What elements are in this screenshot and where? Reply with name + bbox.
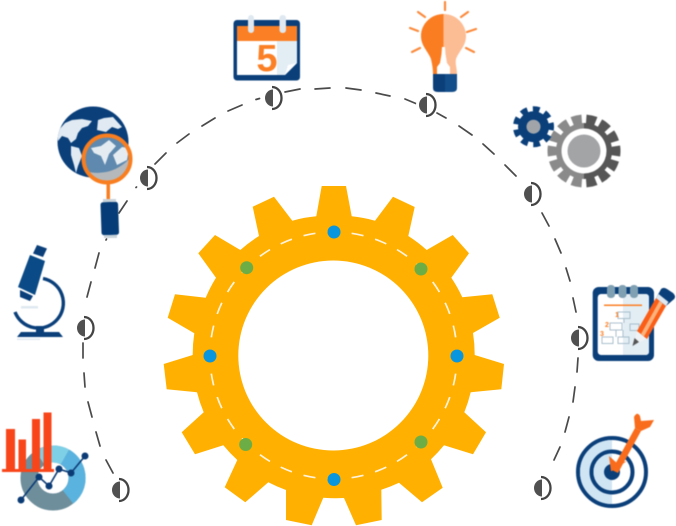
icon: target with arrow xyxy=(578,414,654,506)
icon: calendar xyxy=(234,15,300,80)
blue dot bottom xyxy=(328,473,340,486)
arrow xyxy=(609,414,654,473)
donut xyxy=(29,454,77,502)
magnifier lens xyxy=(85,137,130,181)
magnifier handle xyxy=(100,202,119,235)
pencil xyxy=(632,288,675,346)
globe xyxy=(57,106,128,178)
blue dot right xyxy=(450,350,464,362)
blue dot top xyxy=(328,226,340,238)
dashed outer arc xyxy=(83,88,578,473)
small blue gear xyxy=(516,109,551,144)
icon: notebook with flowchart and pencil: 3 xyxy=(600,331,604,338)
marker: half moon 7 xyxy=(568,327,590,349)
icon: calendar: 5 xyxy=(256,38,278,80)
icon: bar chart with donut and line xyxy=(2,412,88,504)
green dot bottom left xyxy=(239,438,252,451)
marker: half moon 6 xyxy=(521,183,543,205)
icon: notebook with flowchart and pencil: 2 xyxy=(605,322,609,329)
bars xyxy=(2,412,54,472)
marker: half moon 5 xyxy=(416,94,438,116)
icon: gears xyxy=(516,109,616,183)
central gear xyxy=(164,186,504,525)
icon: notebook with flowchart and pencil: 1 xyxy=(615,312,619,319)
icon: light bulb xyxy=(410,2,476,92)
icon: notebook with flowchart and pencil xyxy=(593,285,675,361)
line series xyxy=(18,452,88,504)
marker: half moon 8 xyxy=(531,477,553,499)
green dot bottom right xyxy=(414,436,428,448)
blue dot left xyxy=(204,350,216,362)
green dot top right xyxy=(414,262,428,276)
marker: half moon 4 xyxy=(262,87,284,109)
icon: microscope xyxy=(15,245,63,340)
large grey gear xyxy=(552,119,616,183)
gear hole xyxy=(238,260,428,450)
icon: magnifying glass over globe xyxy=(57,106,130,238)
green dot top left xyxy=(240,261,253,274)
marker: half moon 1 xyxy=(109,479,131,501)
marker: half moon 2 xyxy=(74,317,96,339)
marker: half moon 3 xyxy=(137,167,159,189)
white dashed ring xyxy=(210,232,457,479)
gear body xyxy=(164,186,504,525)
